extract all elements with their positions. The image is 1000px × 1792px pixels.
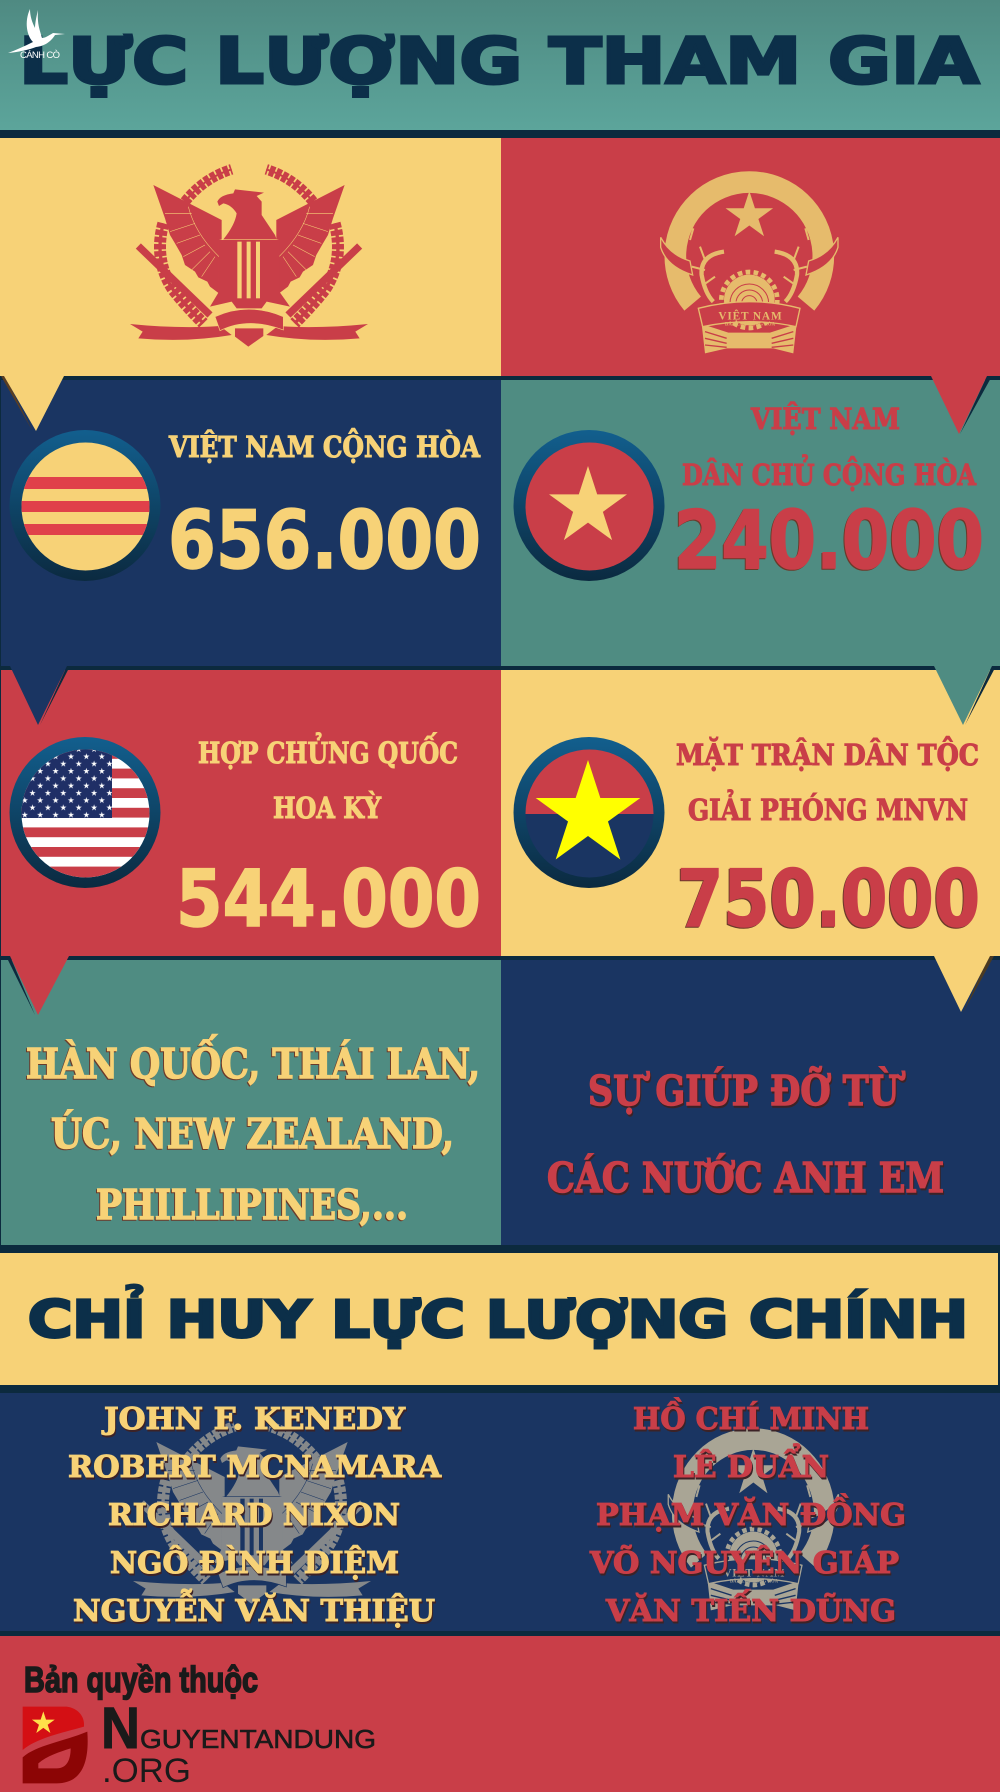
number: 544.000 — [176, 855, 481, 945]
icon: emblem watermark — [668, 1439, 838, 1610]
panel: Mặt Trận Dân Tộc Giải Phóng — [514, 735, 980, 945]
panel: footer — [0, 1636, 1000, 1792]
heading: main commanders: CHỈ HUY LỰC LƯỢNG CHÍNH — [28, 1284, 968, 1350]
list: left commanders: JOHN F. KENEDY — [101, 1402, 406, 1437]
list: right commanders: VÕ NGUYÊN GIÁP — [589, 1544, 899, 1581]
title: LỰC LƯỢNG THAM GIA — [19, 25, 979, 98]
logo wordmark: N — [101, 1696, 140, 1761]
icon: Vietnam national emblem — [661, 182, 838, 353]
icon: NLF flag — [514, 737, 664, 888]
list: right commanders: LÊ DUẨN — [673, 1443, 829, 1485]
list: left commanders — [68, 1402, 442, 1629]
icon: South Vietnam flag — [10, 430, 160, 581]
allies line one: HÀN QUỐC, THÁI LAN, — [26, 1034, 480, 1088]
panel: commanders — [0, 1385, 1000, 1636]
icon: North Vietnam flag — [514, 430, 664, 581]
list: left commanders: ROBERT MCNAMARA — [68, 1450, 442, 1485]
icon: D logo — [23, 1707, 88, 1783]
list: left commanders: NGUYỄN VĂN THIỆU — [73, 1588, 435, 1629]
list: right commanders — [589, 1397, 906, 1629]
list: right commanders: HỒ CHÍ MINH — [633, 1397, 869, 1437]
number: 656.000 — [168, 494, 481, 587]
logo wordmark: .ORG — [102, 1752, 191, 1790]
copyright text: Bản quyền thuộc — [24, 1659, 258, 1700]
arrow: yellow pointer — [1, 376, 64, 431]
icon: Cánh Cò logo — [8, 9, 65, 61]
panel: Việt Nam Dân Chủ Cộng Hòa — [514, 401, 984, 587]
arrow: red pointer — [931, 376, 992, 434]
panel: background rows — [0, 138, 1000, 1253]
arrow: teal pointer — [934, 666, 996, 725]
panel: allied countries — [26, 1034, 480, 1229]
allies line two: ÚC, NEW ZEALAND, — [51, 1109, 454, 1158]
list: right commanders: PHẠM VĂN ĐỒNG — [596, 1493, 906, 1533]
arrow: navy pointer — [10, 666, 70, 725]
panel: fraternal support — [547, 1066, 944, 1202]
icon: US flag — [10, 737, 160, 888]
label line one: VIỆT NAM — [750, 401, 900, 436]
icon: Vietnam national emblem: DÂN CHỦ CỘNG HÒA — [725, 321, 776, 327]
support line one: SỰ GIÚP ĐỠ TỪ — [588, 1066, 905, 1115]
label: VIỆT NAM CỘNG HÒA — [168, 427, 480, 464]
allies line three: PHILLIPINES,... — [96, 1181, 408, 1229]
panel: Việt Nam Cộng Hòa — [10, 427, 481, 587]
icon: Cánh Cò logo: CÁNH CÒ — [20, 50, 60, 61]
list: right commanders: VĂN TIẾN DŨNG — [605, 1589, 896, 1629]
list: left commanders: NGÔ ĐÌNH DIỆM — [110, 1545, 399, 1581]
icon: eagle watermark — [133, 1426, 371, 1604]
label line two: HOA KỲ — [273, 790, 381, 825]
panel: title banner — [0, 0, 1000, 138]
panel: Hợp Chủng Quốc Hoa Kỳ — [10, 731, 481, 945]
label line one: HỢP CHỦNG QUỐC — [198, 731, 458, 770]
arrow: second red pointer — [6, 956, 69, 1015]
support line two: CÁC NƯỚC ANH EM — [547, 1153, 944, 1202]
logo wordmark: GUYENTANDUNG — [140, 1726, 376, 1754]
heading: main commanders — [0, 1253, 1000, 1385]
logo wordmark — [101, 1696, 376, 1790]
arrow: second yellow pointer — [934, 956, 994, 1013]
list: left commanders: RICHARD NIXON — [108, 1498, 400, 1533]
icon: Vietnam national emblem: VIỆT NAM — [718, 309, 782, 322]
icon: eagle emblem — [130, 169, 368, 347]
